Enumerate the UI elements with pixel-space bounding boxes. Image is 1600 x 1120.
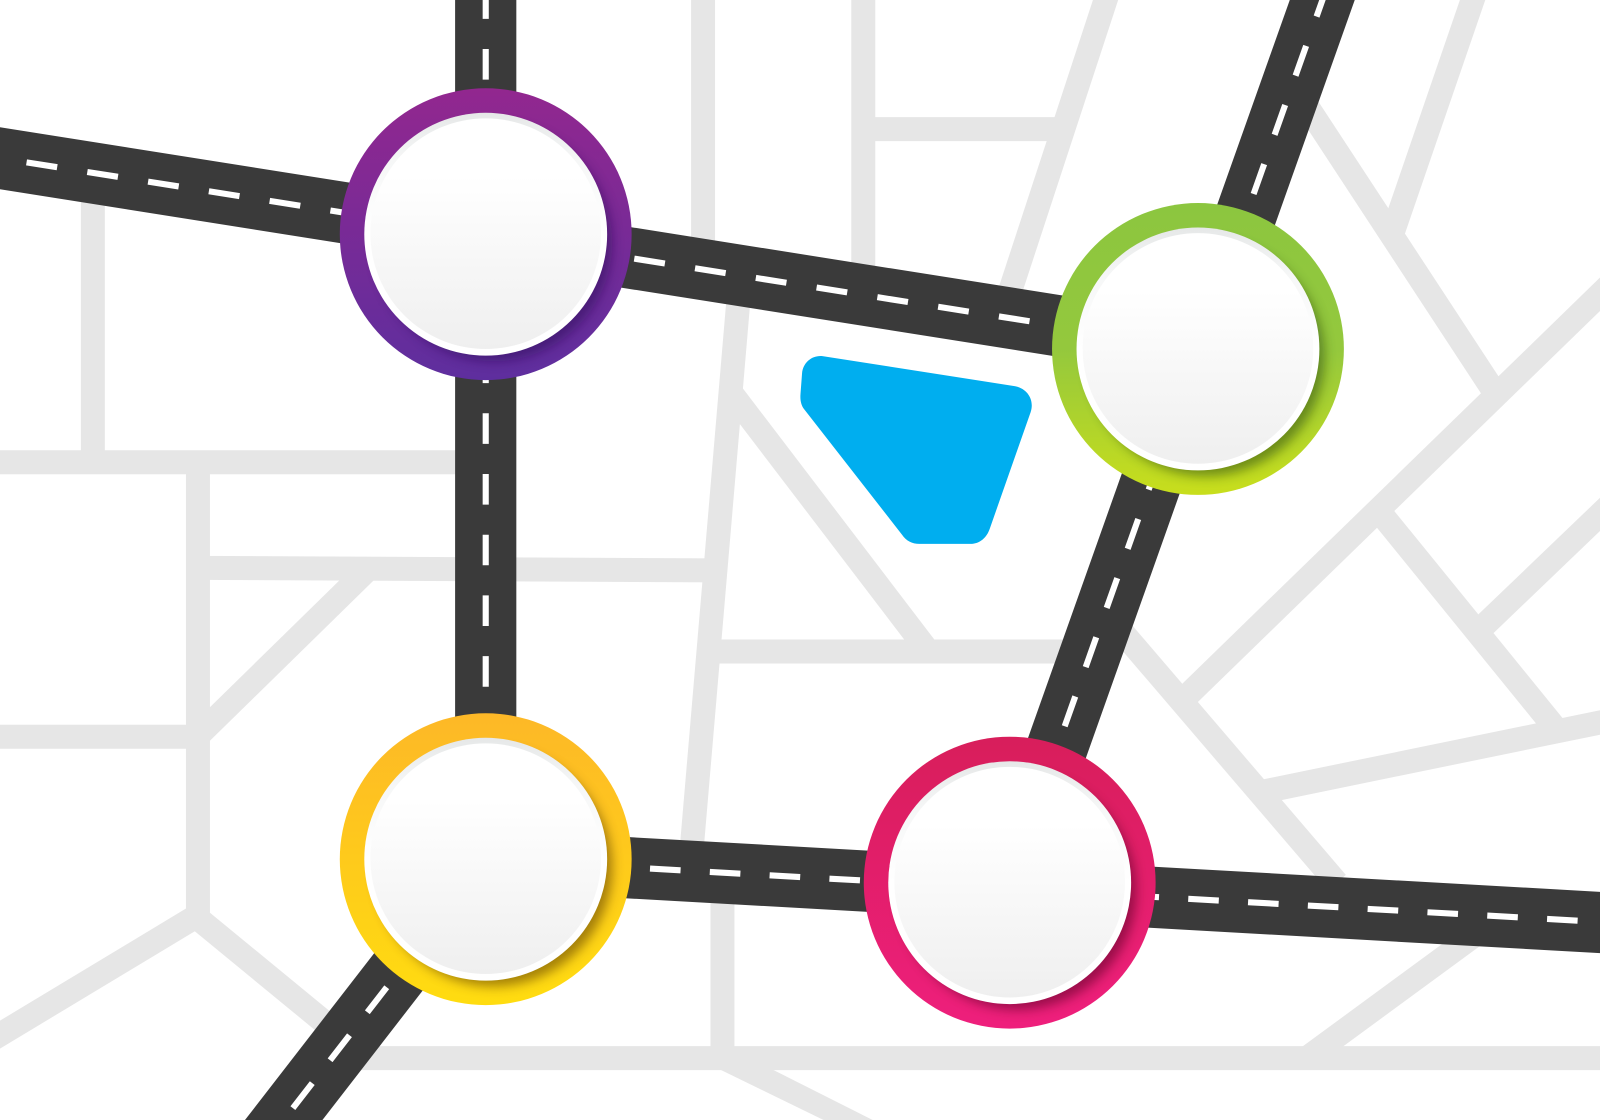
road: purple to yellow vertical: [456, 0, 516, 859]
street branch at bottom: [703, 1061, 878, 1120]
road: yellow through pink to right edge: [486, 860, 1600, 925]
node: green circle: [1052, 203, 1344, 495]
blue centre block: [800, 356, 1032, 544]
node: pink circle: [864, 737, 1156, 1029]
road: left edge through purple to green: [0, 153, 1198, 348]
node: purple circle: [340, 88, 632, 380]
node: yellow circle: [340, 713, 632, 1005]
road: yellow to bottom edge: [245, 859, 486, 1120]
road: top edge through green to pink: [1009, 0, 1337, 883]
